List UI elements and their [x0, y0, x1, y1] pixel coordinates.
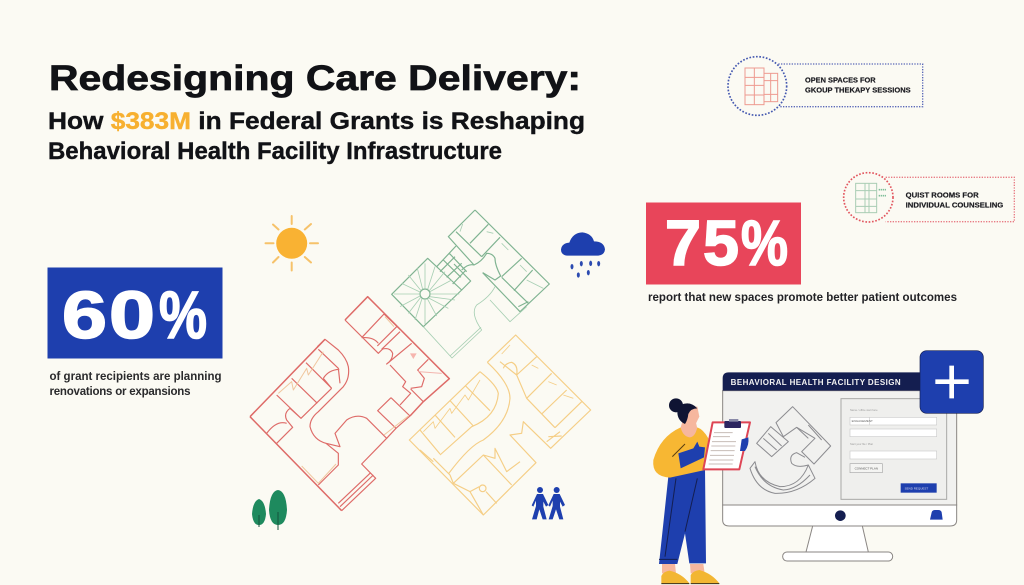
icon: two people walking [532, 487, 565, 519]
on-screen form panel: Name / office start here [850, 408, 878, 412]
dotted circle [728, 57, 787, 115]
monitor body [723, 505, 957, 526]
floor plan: yellow wing [409, 335, 591, 515]
label text [805, 76, 911, 95]
label text: GKOUP THEKAPY SESSIONS [805, 86, 911, 95]
sweater [653, 427, 708, 478]
dotted label frame [886, 177, 1014, 222]
title block [48, 59, 585, 165]
stat description: of grant recipients are planning [50, 371, 222, 383]
on-screen form panel: Start your file / Plan [850, 442, 874, 446]
stat number: 0 [109, 278, 155, 353]
stat description: renovations or expansions [50, 386, 190, 398]
label text: OPEN SPACES FOR [805, 76, 876, 85]
on-screen form panel [841, 399, 947, 499]
clipboard [703, 422, 750, 469]
neck [681, 418, 697, 438]
legs and shoes [662, 564, 705, 573]
icon: room grid [856, 183, 886, 213]
icon: floor grid [745, 68, 778, 105]
on-screen form panel: SEND REQUEST [905, 486, 928, 490]
callout: open spaces [728, 57, 923, 115]
stat number [62, 278, 207, 353]
monitor stand [783, 526, 893, 561]
head and hair [685, 407, 699, 423]
monitor screen [723, 391, 957, 505]
stat panel: 60% [48, 268, 222, 398]
monitor camera dot [835, 510, 846, 521]
monitor small blue button [930, 510, 943, 520]
stat number [665, 207, 788, 279]
stat number: 5 [703, 207, 739, 279]
label text [906, 191, 1004, 210]
stat number: % [159, 278, 207, 353]
monitor header bar: BEHAVIORAL HEALTH FACILITY DESIGN [731, 378, 901, 387]
stat panel: 75% [646, 202, 957, 304]
floor plan: green wing [392, 210, 549, 358]
label text: QUIST ROOMS FOR [906, 191, 979, 200]
stat description [50, 371, 222, 398]
person with clipboard [653, 398, 750, 584]
on-screen form panel: CONNECT PLAN [855, 466, 878, 470]
dotted label frame [778, 64, 923, 107]
icon: rain cloud [561, 232, 605, 278]
trousers [659, 468, 706, 564]
subtitle line 2: Behavioral Health Facility Infrastructure [48, 138, 502, 165]
icon: plus badge [920, 351, 983, 413]
label text: INDIVIDUAL COUNSELING [906, 201, 1004, 210]
icon: sun [266, 216, 318, 270]
stat number: 7 [665, 207, 701, 279]
blue gloves [678, 442, 705, 468]
on-screen floor plan [750, 407, 831, 493]
main title: Redesigning Care Delivery: [49, 59, 581, 98]
callout: quiet rooms [844, 173, 1014, 222]
stat description: report that new spaces promote better patient outcomes [648, 292, 957, 304]
floor plan: red wing [250, 297, 449, 511]
on-screen form panel: ENGAGEMENT [852, 419, 873, 423]
blue stat box [48, 268, 222, 358]
red stat box [646, 202, 801, 284]
stat number: % [741, 207, 788, 279]
illustration: monitor and person [653, 351, 983, 584]
icon: trees [252, 490, 287, 530]
subtitle line 1: How $383M in Federal Grants is Reshaping [48, 108, 585, 135]
dotted circle [844, 173, 893, 222]
stat number: 6 [62, 278, 107, 353]
monitor header bar [723, 372, 927, 391]
